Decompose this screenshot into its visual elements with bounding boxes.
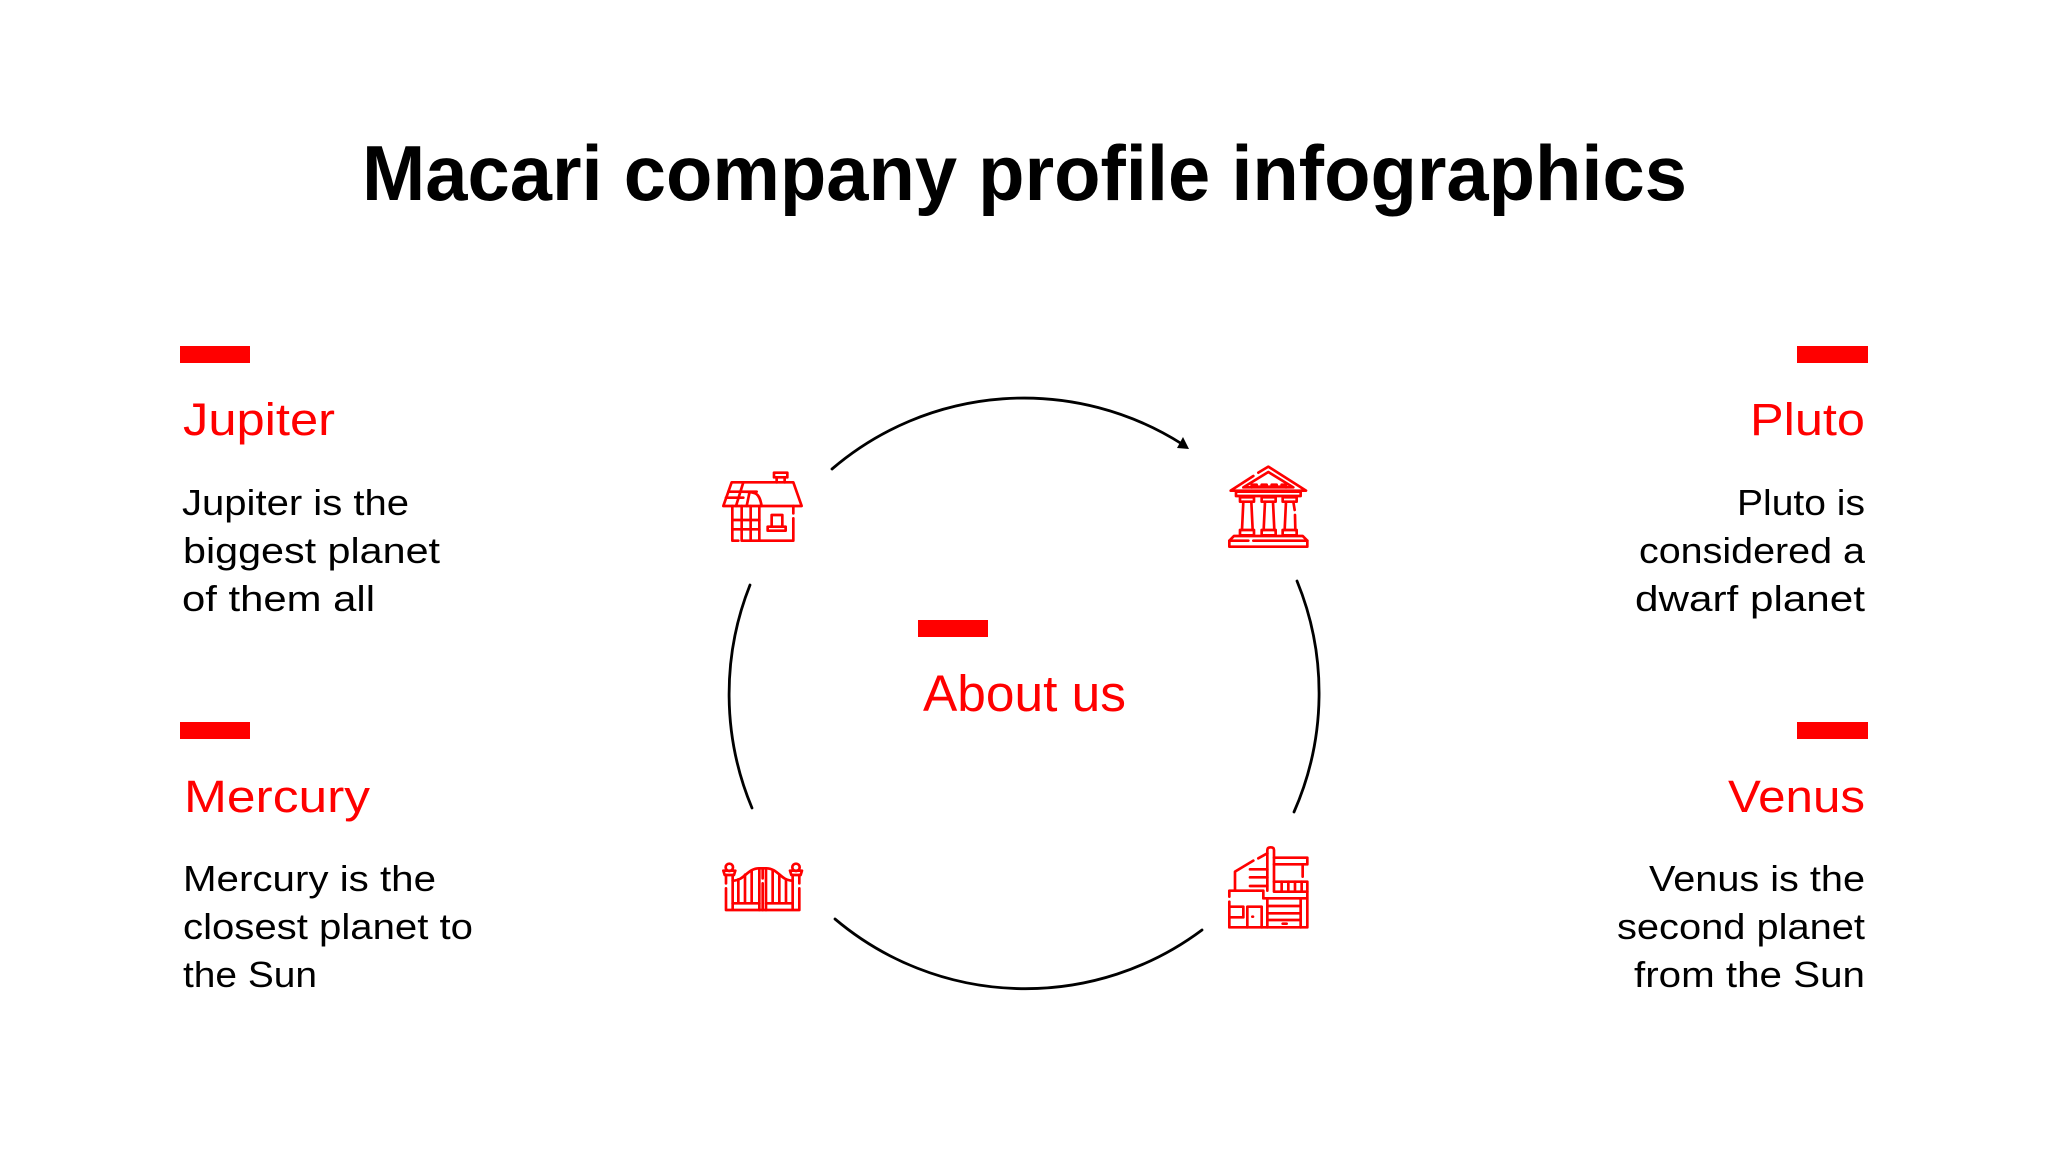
arc: right <box>1294 581 1319 812</box>
text: Jupiter description: biggest planet <box>183 530 440 571</box>
arc: top with arrow <box>832 398 1189 469</box>
text: Pluto description: dwarf planet <box>1635 578 1865 619</box>
heading: Mercury: Mercury <box>184 771 371 822</box>
text: Venus description <box>1617 858 1865 995</box>
text: Jupiter description: of them all <box>182 578 375 619</box>
center label: About us <box>918 620 1126 722</box>
heading: About us: About us <box>923 665 1126 722</box>
title: Macari company profile infographics <box>362 129 1687 217</box>
icon: classical building <box>1229 467 1307 547</box>
text: Venus description: from the Sun <box>1634 954 1865 995</box>
icon: modern house <box>1229 847 1307 927</box>
panel: Jupiter <box>180 346 440 619</box>
text: Pluto description: considered a <box>1639 530 1866 571</box>
icon: gate <box>723 864 802 910</box>
panel: Venus <box>1617 722 1868 995</box>
heading: Venus: Venus <box>1728 771 1865 822</box>
red bar: Jupiter <box>180 346 250 363</box>
text: Mercury description: closest planet to <box>183 906 473 947</box>
cycle ring of arcs <box>729 398 1319 989</box>
text: Mercury description <box>183 858 473 995</box>
text: Venus description: second planet <box>1617 906 1865 947</box>
heading: Pluto: Pluto <box>1750 394 1865 445</box>
text: Venus description: Venus is the <box>1649 858 1865 899</box>
text: Pluto description <box>1635 482 1866 619</box>
arc: bottom <box>835 919 1202 989</box>
text: Mercury description: the Sun <box>183 954 317 995</box>
red bar: Venus <box>1797 722 1868 739</box>
heading: Jupiter: Jupiter <box>183 394 335 445</box>
panel: Pluto <box>1635 346 1868 619</box>
panel: Mercury <box>180 722 473 995</box>
text: Mercury description: Mercury is the <box>183 858 436 899</box>
red bar: Pluto <box>1797 346 1868 363</box>
text: Jupiter description: Jupiter is the <box>182 482 409 523</box>
red bar: About us <box>918 620 988 637</box>
text: Pluto description: Pluto is <box>1737 482 1865 523</box>
icon: house <box>723 473 802 541</box>
red bar: Mercury <box>180 722 250 739</box>
arc: left <box>729 585 752 808</box>
text: Jupiter description <box>182 482 440 619</box>
